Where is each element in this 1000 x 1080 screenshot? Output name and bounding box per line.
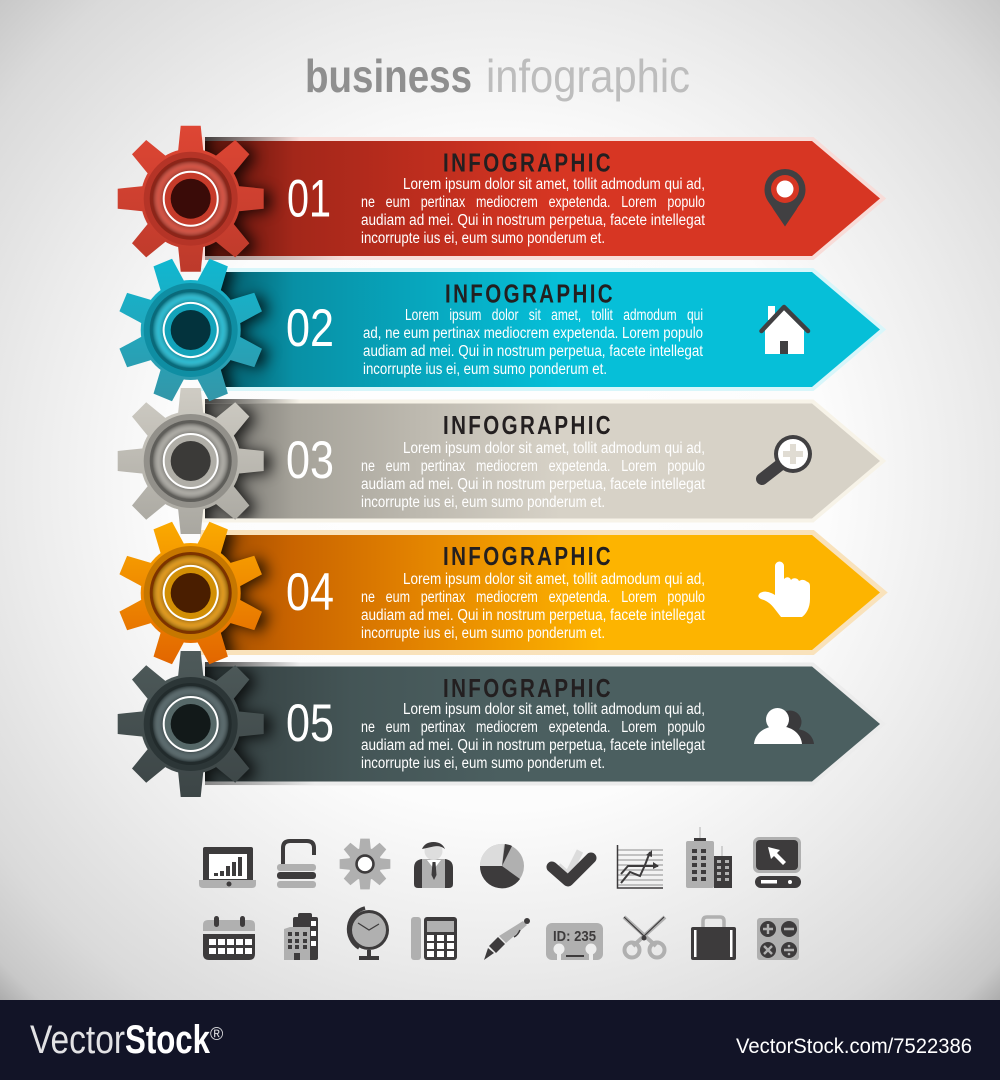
icon: calculator signs: [757, 918, 799, 960]
number 03: 03: [286, 431, 334, 490]
panel: step 04 arrow: [205, 535, 880, 650]
icon: calendar: [203, 916, 255, 960]
gear 03: [118, 388, 264, 534]
number 04: 04: [286, 563, 334, 622]
body text 02: [363, 307, 704, 378]
body text 04: ne eum pertinax mediocrem expetenda. Lorem populo: [361, 589, 705, 606]
body text 02: Lorem ipsum dolor sit amet, tollit admodum qui: [405, 307, 703, 324]
icon row 2: [203, 908, 799, 960]
body text 04: Lorem ipsum dolor sit amet, tollit admodum qui ad,: [403, 571, 705, 588]
body text 05: Lorem ipsum dolor sit amet, tollit admodum qui ad,: [403, 701, 705, 718]
icon: briefcase: [691, 917, 736, 960]
icon: users: [754, 708, 814, 744]
body text 05: incorrupte ius ei, eum sumo ponderum et.: [361, 755, 605, 772]
footer logo: Stock: [125, 1018, 211, 1062]
icon: house: [762, 306, 808, 354]
icon: computer cursor: [753, 837, 801, 888]
footer logo: [30, 1018, 223, 1062]
body text 03: audiam ad mei. Qui in nostrum perpetua, facete intellegat: [361, 476, 706, 493]
icon: pie chart: [480, 844, 524, 888]
body text 01: [361, 176, 706, 247]
icon: apartment buildings: [284, 913, 318, 960]
body text 05: ne eum pertinax mediocrem expetenda. Lorem populo: [361, 719, 705, 736]
footer logo: ®: [210, 1024, 223, 1044]
body text 02: audiam ad mei. Qui in nostrum perpetua, facete intellegat: [363, 343, 704, 360]
panel: step 03 arrow: [205, 399, 880, 518]
icon: laptop with chart: [199, 847, 256, 888]
icon: globe clock: [349, 908, 389, 960]
panel: step 01 arrow: [205, 137, 880, 260]
panel: step 05 arrow: [205, 662, 880, 785]
body text 02: incorrupte ius ei, eum sumo ponderum et.: [363, 361, 607, 378]
gear shadows on the arrows: [205, 141, 280, 781]
icon: open padlock: [277, 841, 316, 888]
icon: map pin: [764, 169, 806, 226]
icon: pointing hand: [758, 562, 810, 617]
body text 05: audiam ad mei. Qui in nostrum perpetua, facete intellegat: [361, 737, 706, 754]
body text 03: [361, 440, 706, 511]
body text 04: incorrupte ius ei, eum sumo ponderum et.: [361, 625, 605, 642]
gear 01: [118, 126, 264, 272]
body text 05: [361, 701, 706, 772]
gear 04: [95, 498, 286, 688]
body text 01: incorrupte ius ei, eum sumo ponderum et.: [361, 230, 605, 247]
heading 03: INFOGRAPHIC: [443, 410, 613, 440]
icon: settings gear: [341, 840, 389, 888]
heading 01: INFOGRAPHIC: [443, 148, 613, 178]
footer bar: [0, 1000, 1000, 1080]
icon: office towers: [686, 827, 732, 888]
panel: step 02 arrow: [205, 272, 880, 387]
gear 05: [118, 651, 264, 797]
icon: magnifier: [762, 435, 812, 479]
number 01: 01: [287, 170, 331, 228]
gear 02: [95, 235, 286, 425]
body text 03: ne eum pertinax mediocrem expetenda. Lorem populo: [361, 458, 705, 475]
body text 03: Lorem ipsum dolor sit amet, tollit admodum qui ad,: [403, 440, 705, 457]
footer logo: Vector: [30, 1018, 125, 1062]
body text 01: Lorem ipsum dolor sit amet, tollit admodum qui ad,: [403, 176, 705, 193]
body text 03: incorrupte ius ei, eum sumo ponderum et.: [361, 494, 605, 511]
icon: ID badge: [546, 923, 603, 960]
number 02: 02: [286, 299, 334, 358]
icon: businessman: [414, 842, 453, 888]
body text 01: ne eum pertinax mediocrem expetenda. Lorem populo: [361, 194, 705, 211]
icon: phone and keypad: [411, 917, 457, 960]
icon: ID badge: ID: 235: [553, 928, 596, 945]
body text 04: audiam ad mei. Qui in nostrum perpetua, facete intellegat: [361, 607, 706, 624]
icon row 1: [199, 827, 801, 888]
number 05: 05: [286, 694, 334, 753]
icon: line chart: [618, 845, 663, 888]
icon: check mark: [552, 851, 591, 881]
heading 04: INFOGRAPHIC: [443, 541, 613, 571]
body text 04: [361, 571, 706, 642]
title: infographic: [486, 50, 690, 102]
footer url: VectorStock.com/7522386: [736, 1035, 972, 1058]
body text 01: audiam ad mei. Qui in nostrum perpetua, facete intellegat: [361, 212, 706, 229]
title: business: [305, 50, 472, 102]
icon: scissors: [624, 917, 665, 958]
title: [305, 50, 690, 102]
heading 02: INFOGRAPHIC: [445, 279, 615, 309]
icon: pen: [484, 918, 530, 960]
body text 02: ad, ne eum pertinax mediocrem expetenda. Lorem populo: [363, 325, 703, 342]
heading 05: INFOGRAPHIC: [443, 673, 613, 703]
